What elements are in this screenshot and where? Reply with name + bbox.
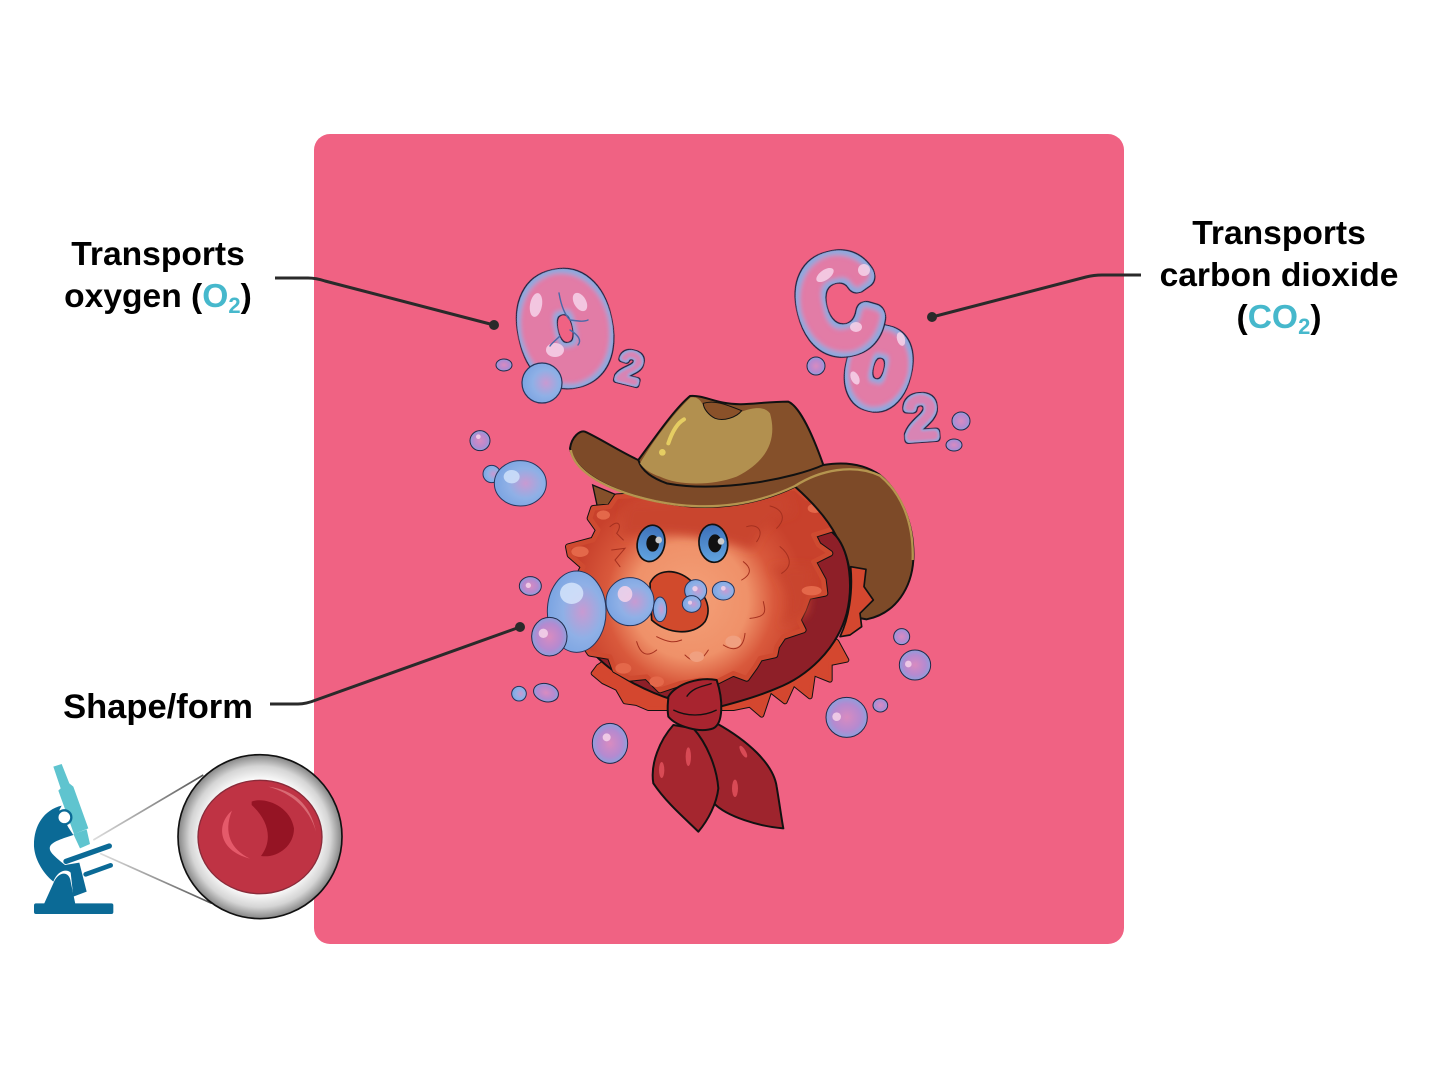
label: transports carbon dioxide: carbon dioxide (1160, 257, 1398, 294)
callout line: oxygen (275, 278, 499, 330)
microscope (34, 764, 113, 914)
bubble letters: CO2: C (787, 232, 890, 378)
bandana wrap (597, 523, 850, 708)
spiky cell body (568, 488, 837, 690)
label: transports carbon dioxide: (CO (1236, 299, 1298, 336)
frilled cell edge behind bandana (593, 580, 847, 715)
eyes (634, 523, 730, 564)
label: transports carbon dioxide: ) (1310, 299, 1322, 336)
icon: microscope with magnified red blood cell (34, 755, 342, 919)
bubble letters: CO2 (787, 232, 970, 452)
red blood cell (198, 780, 322, 894)
bubbles around the character (470, 431, 931, 763)
magnifier lens (178, 755, 342, 919)
label: shape/form: Shape/form (63, 688, 253, 726)
illustration: red blood cell cowboy character (470, 396, 931, 832)
cowboy hat (570, 396, 913, 619)
skin shading and bumps (571, 493, 822, 687)
bubble letters: O2: O (513, 253, 618, 405)
bubble letters: O2: 2 (613, 342, 647, 393)
bandana tails (653, 679, 783, 832)
label: transports oxygen: 2 (228, 293, 241, 318)
label: transports oxygen: oxygen (O (64, 278, 228, 315)
label: transports oxygen: Transports (71, 236, 245, 273)
bubble letters: O2 (496, 253, 647, 405)
callout line: carbon dioxide (927, 275, 1141, 322)
mouth (650, 572, 708, 632)
bubble letters: CO2: 2 (903, 385, 939, 452)
light beams (93, 775, 212, 903)
hat back under brim (593, 485, 618, 510)
label: transports oxygen: ) (241, 278, 252, 315)
callout line: shape/form (270, 622, 525, 704)
panel: pink background (314, 134, 1124, 944)
label: transports carbon dioxide: Transports (1192, 215, 1366, 252)
frill visible in front of the brim (840, 567, 873, 637)
bubble letters: CO2: O (840, 313, 917, 425)
label: transports carbon dioxide: 2 (1298, 314, 1310, 339)
